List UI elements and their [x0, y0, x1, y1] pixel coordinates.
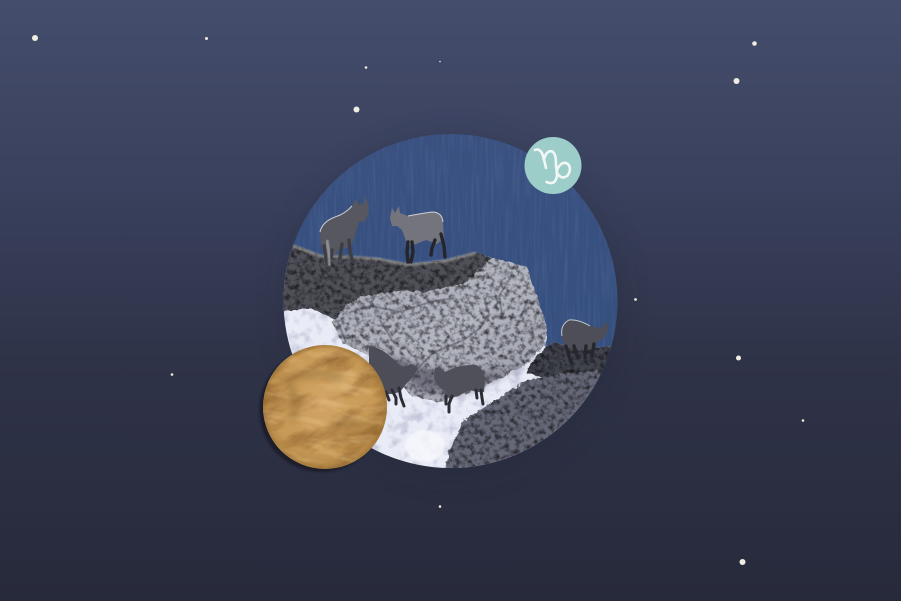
soft shadow behind photo circle [283, 136, 623, 476]
rock cracks [337, 275, 528, 368]
sky [280, 130, 622, 472]
badge circle [524, 137, 582, 194]
planet shadow [260, 348, 384, 472]
dark grass ridge [280, 244, 492, 320]
ibex: lower left [369, 346, 418, 406]
sunlit ridge edge [293, 246, 476, 265]
stars [32, 35, 804, 565]
icon: Capricorn glyph [535, 149, 570, 183]
zodiac badge: Capricorn [524, 137, 582, 194]
snow highlight [405, 430, 445, 462]
ibex: top middle [390, 206, 445, 262]
circular photo: ibexes on a mountain rock [278, 130, 625, 480]
large boulder [332, 254, 547, 403]
boulder shading and cracks [337, 275, 530, 392]
planet surface texture [263, 345, 387, 469]
right ledge [525, 342, 615, 384]
foreground rock [444, 370, 610, 472]
lower shade on boulder [370, 350, 530, 392]
snow ground [284, 292, 602, 468]
planet Venus [258, 345, 387, 473]
planet disc [263, 345, 387, 469]
ibex: lower middle [434, 365, 485, 412]
ibex: top left [320, 196, 369, 270]
upper left snow [284, 250, 292, 288]
ibex: right [561, 320, 608, 362]
